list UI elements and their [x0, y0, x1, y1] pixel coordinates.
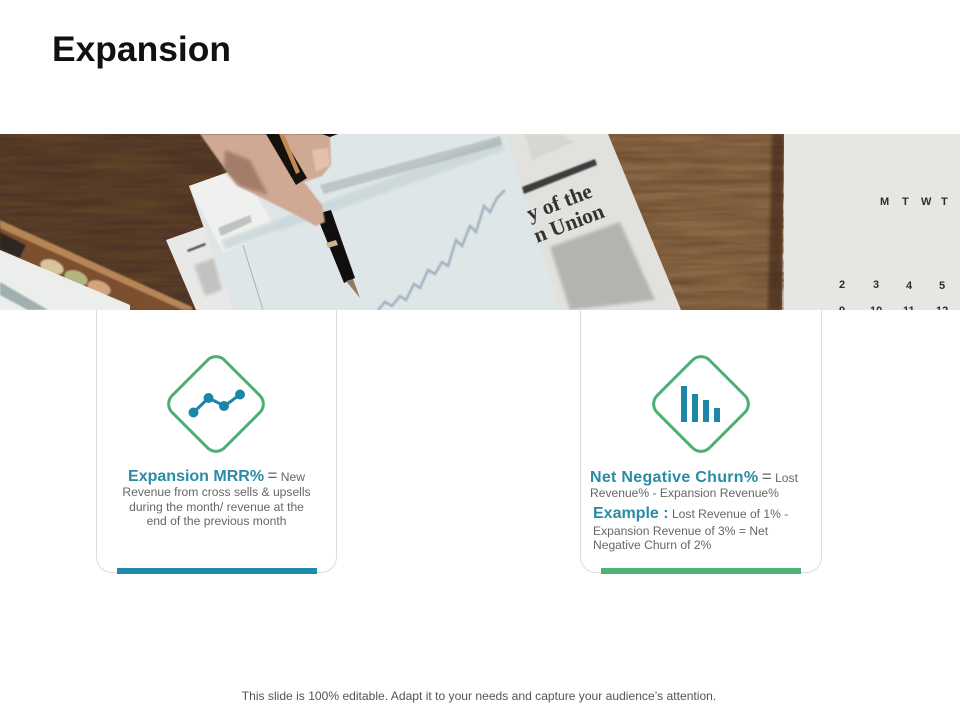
photo banner: hand with pen over financial papers on a wooden desk: [0, 134, 960, 310]
tray with tokens: [0, 220, 192, 310]
card accent bar: [117, 568, 317, 574]
footer note: This slide is 100% editable. Adapt it to your needs and capture your audience’s attention.: [242, 689, 716, 703]
chart axis: [243, 245, 263, 310]
light wood desk: [605, 134, 784, 310]
chart report sheet: [189, 134, 565, 310]
text: Expansion MRR definition: during the month/ revenue at the: [129, 500, 304, 514]
report text blur: [218, 215, 252, 236]
text: Expansion MRR definition: Revenue from cross sells & upsells: [122, 485, 311, 499]
photo banner: hand with pen over financial papers on a wooden desk: 5: [939, 280, 945, 292]
text: Example: Expansion Revenue of 3% = Net: [593, 524, 768, 538]
photo banner: hand with pen over financial papers on a wooden desk: 4: [906, 280, 913, 292]
icon: line chart in diamond: [167, 355, 265, 453]
photo banner: hand with pen over financial papers on a wooden desk: W: [921, 196, 932, 208]
card: Net Negative Churn: [580, 280, 822, 574]
card outline: [96, 280, 337, 573]
text: Net Negative Churn definition: Revenue% - Expansion Revenue%: [590, 486, 779, 500]
photo banner: hand with pen over financial papers on a wooden desk: M: [880, 196, 889, 208]
lower pen: [316, 210, 360, 298]
calendar: [784, 134, 960, 310]
text: Example: [593, 505, 788, 552]
card: Expansion MRR: [96, 310, 337, 574]
upper pen: [266, 134, 338, 185]
white paper at left: [0, 250, 130, 310]
photo banner: hand with pen over financial papers on a wooden desk: 2: [839, 279, 845, 291]
dark wood desk: [0, 134, 620, 310]
photo banner: hand with pen over financial papers on a wooden desk: T: [941, 196, 948, 208]
newspaper: [505, 134, 681, 310]
photo banner: hand with pen over financial papers on a wooden desk: n Union: [530, 199, 607, 248]
title: Expansion: [52, 29, 231, 69]
photo banner: hand with pen over financial papers on a wooden desk: T: [902, 196, 909, 208]
back sheet: [166, 226, 240, 310]
text: Expansion MRR definition: end of the previous month: [147, 514, 286, 528]
text: Expansion MRR definition: Expansion MRR% = New: [128, 466, 305, 485]
text: Example: Negative Churn of 2%: [593, 538, 711, 552]
card accent bar: [601, 568, 801, 574]
photo banner: hand with pen over financial papers on a wooden desk: 3: [873, 279, 879, 291]
card outline: [580, 280, 822, 573]
stock line: [378, 190, 505, 310]
text: Net Negative Churn definition: [590, 467, 798, 500]
photo banner: hand with pen over financial papers on a wooden desk: y of the: [523, 179, 595, 226]
text: Expansion MRR definition: [122, 466, 311, 528]
newspaper column text: [550, 222, 655, 310]
text: Example: Example : Lost Revenue of 1% -: [593, 505, 788, 522]
icon: bar chart in diamond: [652, 355, 750, 453]
text: Net Negative Churn definition: Net Negative Churn% = Lost: [590, 467, 798, 486]
hand: [200, 134, 331, 226]
